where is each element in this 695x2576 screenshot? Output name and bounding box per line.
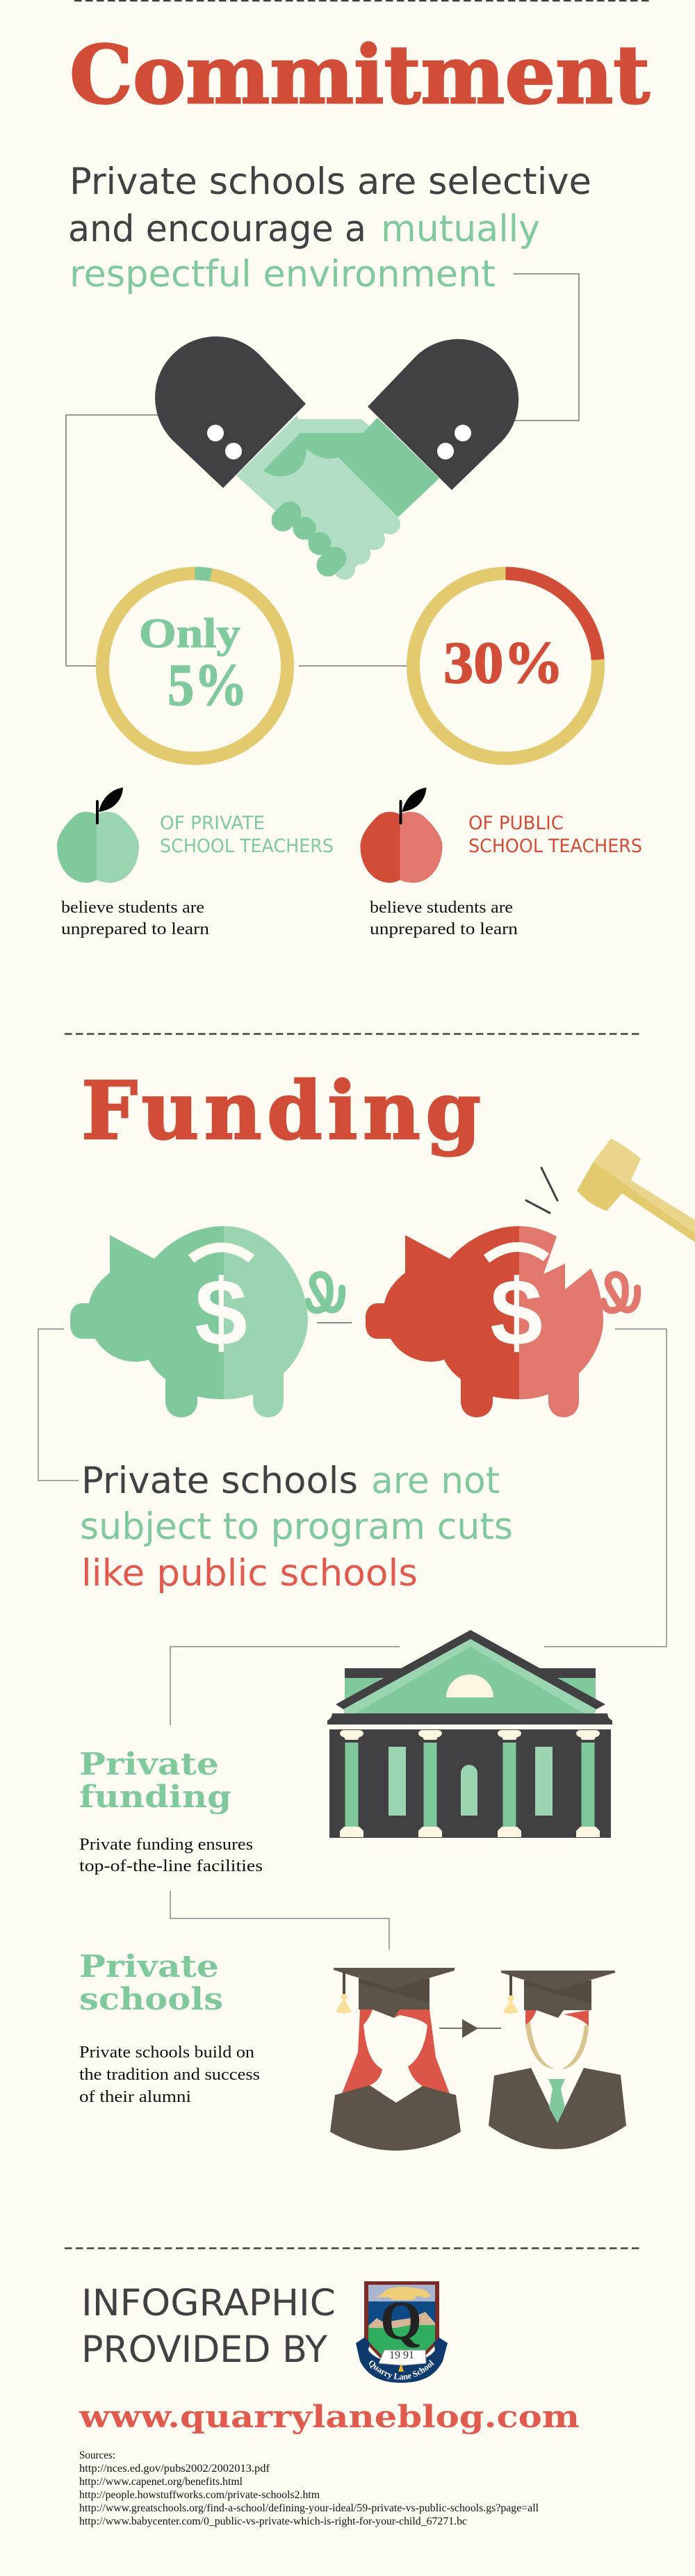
icon: green apple <box>57 788 139 883</box>
icon: broken red piggy bank: $ <box>490 1260 543 1365</box>
text block: private schools <box>79 1949 260 2106</box>
stat: public school teachers: unprepared to learn <box>370 920 518 938</box>
stat: private school teachers <box>57 788 334 938</box>
logo: Quarry Lane School crest: 19 91 <box>389 2349 414 2361</box>
text block: private funding: funding <box>79 1779 231 1815</box>
arrow: graduate to graduate <box>439 2019 501 2038</box>
sources list <box>79 2449 539 2527</box>
chart: private teachers donut 5%: Only <box>139 610 240 656</box>
sources list: http://people.howstuffworks.com/private-schools2.htm <box>79 2489 320 2501</box>
intro text: respectful environment <box>70 253 496 295</box>
logo: Quarry Lane School crest: Quarry Lane School <box>369 2360 434 2380</box>
sources list: http://www.capenet.org/benefits.html <box>79 2476 243 2488</box>
text block: private schools: the tradition and success <box>79 2066 260 2084</box>
provided by heading: PROVIDED BY <box>81 2329 328 2371</box>
panel: funding <box>38 1064 695 2151</box>
text block: private schools: Private <box>79 1949 219 1984</box>
chart: private teachers donut 5% <box>103 573 288 758</box>
icon: green piggy bank: $ <box>195 1260 247 1365</box>
icon: gavel <box>577 1139 695 1242</box>
stat: public school teachers: OF PUBLIC <box>468 813 564 834</box>
chart: public teachers donut 30% <box>413 573 598 758</box>
icon: female graduate <box>330 1968 461 2151</box>
funding statement <box>80 1460 513 1595</box>
text block: private schools: Private schools build on <box>79 2044 254 2062</box>
stat: public school teachers <box>360 788 642 938</box>
connector lines: commitment <box>66 274 579 666</box>
panel: footer <box>79 2281 580 2527</box>
stat: public school teachers: believe students are <box>370 899 513 917</box>
chart: private teachers donut 5%: 5% <box>167 651 247 718</box>
chart: public teachers donut 30%: 30% <box>443 629 564 696</box>
text block: private schools: of their alumni <box>79 2088 191 2106</box>
impact marks <box>526 1168 557 1213</box>
icon: handshake <box>155 336 518 580</box>
stat: public school teachers: SCHOOL TEACHERS <box>468 835 642 857</box>
sources list: http://www.greatschools.org/find-a-school/defining-your-ideal/59-private-vs-public-schools.gs?page=all <box>79 2502 539 2514</box>
funding statement: like public schools <box>81 1552 418 1595</box>
sources list: http://nces.ed.gov/pubs2002/2002013.pdf <box>79 2463 270 2475</box>
stat: private school teachers: believe students are <box>61 899 204 917</box>
icon: red apple <box>360 788 442 883</box>
stat: private school teachers: SCHOOL TEACHERS <box>160 835 334 857</box>
title: Commitment <box>70 28 650 122</box>
intro text <box>68 161 591 295</box>
text block: private funding: Private funding ensures <box>79 1836 253 1854</box>
icon: male graduate <box>489 1971 626 2149</box>
provided by heading: INFOGRAPHIC <box>81 2282 336 2324</box>
funding statement: Private schools <box>81 1460 358 1502</box>
website url: www.quarrylaneblog.com <box>79 2399 580 2435</box>
connector lines: funding <box>38 1323 667 1950</box>
stat: private school teachers: unprepared to learn <box>61 920 209 938</box>
sources list: Sources: <box>79 2449 115 2461</box>
stat: private school teachers: OF PRIVATE <box>160 813 265 834</box>
text block: private schools: schools <box>79 1982 223 2017</box>
text block: private funding: Private <box>79 1747 219 1782</box>
icon: school building <box>327 1630 612 1838</box>
panel: commitment <box>57 28 650 938</box>
intro text: and encourage a <box>68 208 366 250</box>
funding statement: are not <box>371 1460 500 1502</box>
funding statement: subject to program cuts <box>80 1506 513 1548</box>
icon: green piggy bank <box>70 1226 342 1417</box>
intro text: mutually <box>381 208 540 250</box>
logo: Quarry Lane School crest: Q <box>380 2290 422 2351</box>
text block: private funding <box>79 1747 263 1875</box>
logo: Quarry Lane School crest <box>356 2281 448 2383</box>
intro text: Private schools are selective <box>70 161 591 203</box>
icon: broken red piggy bank <box>366 1226 637 1417</box>
title: Funding <box>81 1064 481 1157</box>
text block: private funding: top-of-the-line facilities <box>79 1857 263 1875</box>
provided by heading <box>81 2282 336 2371</box>
sources list: http://www.babycenter.com/0_public-vs-private-which-is-right-for-your-child_67271.bc <box>79 2516 467 2527</box>
